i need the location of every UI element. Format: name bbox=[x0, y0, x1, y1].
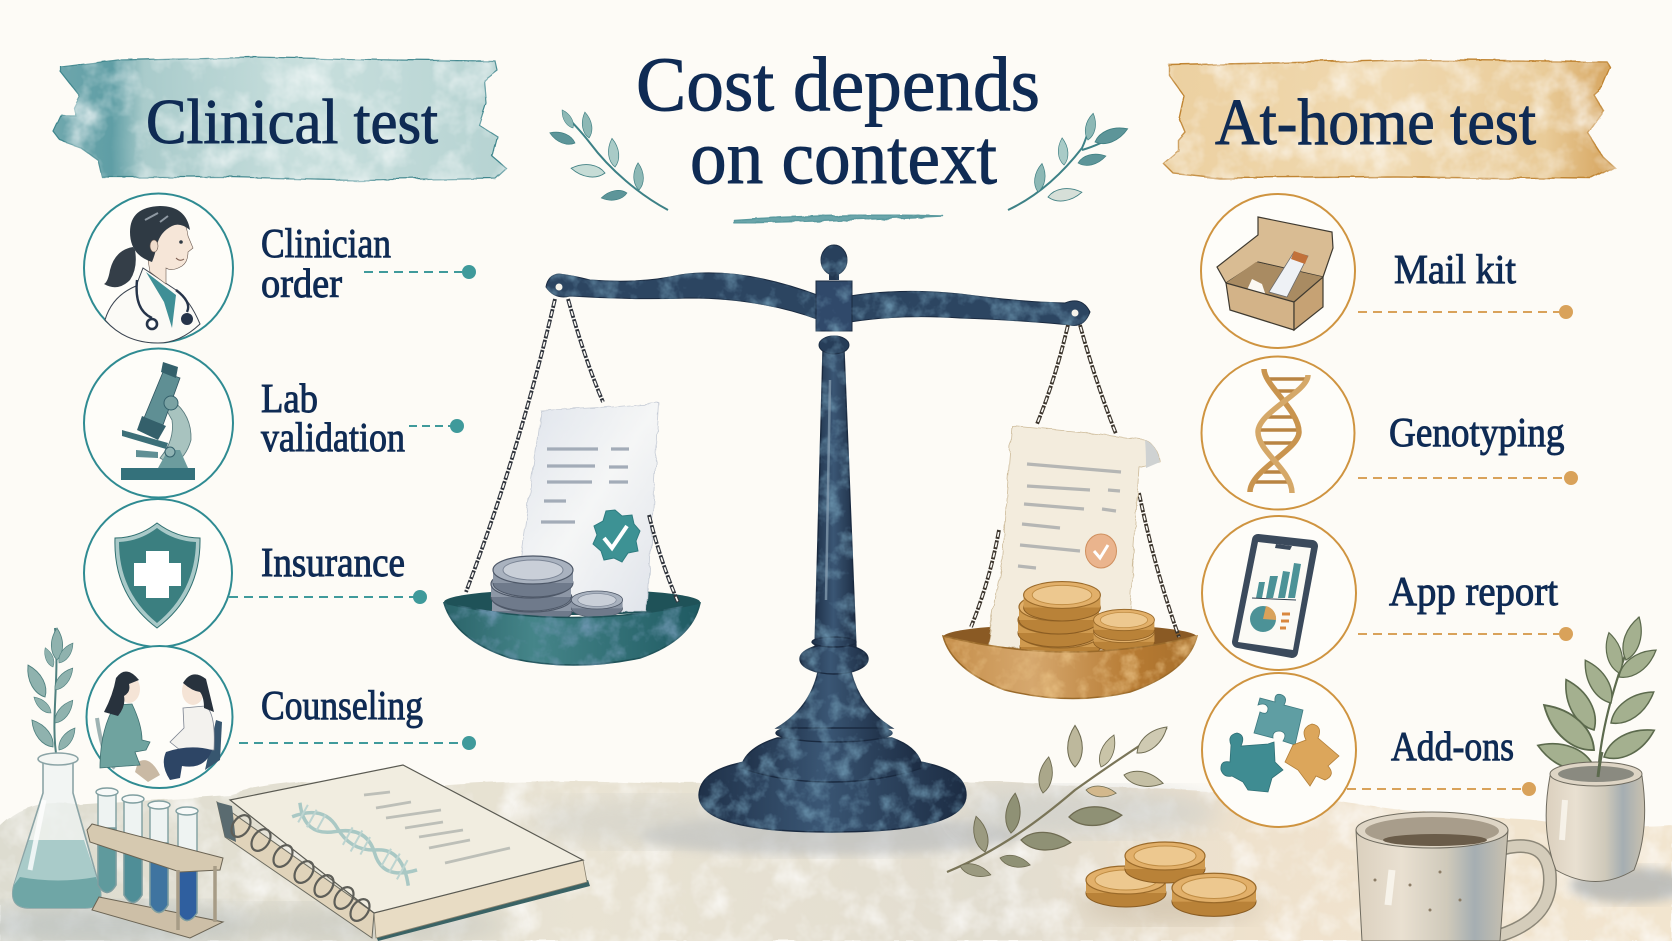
label: insurance: Insurance bbox=[261, 539, 405, 585]
title: on context bbox=[690, 114, 997, 200]
connector bbox=[1358, 627, 1573, 641]
icon: phone report bbox=[1202, 516, 1356, 670]
sprig: left of title bbox=[548, 108, 668, 210]
label: counseling: Counseling bbox=[261, 682, 423, 728]
left pan bbox=[444, 299, 700, 665]
label: add-ons: Add-ons bbox=[1391, 723, 1514, 769]
label: mail kit: Mail kit bbox=[1394, 246, 1517, 292]
test tube rack bbox=[87, 788, 223, 938]
label: clinician order: Clinician bbox=[261, 220, 391, 266]
icon: mail kit box bbox=[1201, 194, 1355, 348]
row: counseling bbox=[86, 646, 476, 788]
label: lab validation: validation bbox=[261, 414, 405, 460]
spiral rings bbox=[228, 812, 373, 924]
right receipt bbox=[987, 426, 1160, 648]
right pan bbox=[943, 325, 1197, 699]
right chains bbox=[971, 325, 1179, 637]
icon: dna helix bbox=[1202, 356, 1354, 510]
label: lab validation bbox=[261, 375, 405, 460]
row: mail kit bbox=[1201, 194, 1573, 348]
notebook with dna bbox=[217, 765, 590, 941]
row: genotyping bbox=[1202, 356, 1578, 510]
left receipt bbox=[520, 403, 659, 612]
banner: clinical test bbox=[54, 57, 506, 180]
cover dna bbox=[290, 798, 421, 886]
connector bbox=[364, 265, 476, 279]
left chains bbox=[466, 299, 603, 592]
balance scale bbox=[444, 245, 1197, 832]
row: app report bbox=[1202, 516, 1573, 670]
label: genotyping: Genotyping bbox=[1389, 409, 1564, 455]
heading: clinical test: Clinical test bbox=[146, 86, 438, 157]
icon: shield bbox=[84, 499, 232, 647]
title underline bbox=[734, 215, 943, 223]
table coins bbox=[1086, 842, 1256, 916]
plant in flask bbox=[22, 628, 79, 760]
label: clinician order bbox=[261, 220, 391, 306]
flask with plant bbox=[13, 628, 101, 908]
icon: two people talking bbox=[86, 646, 232, 788]
label: lab validation: Lab bbox=[261, 375, 318, 421]
tubes bbox=[96, 788, 198, 920]
left chain lower bbox=[649, 515, 678, 602]
scale stand bbox=[546, 245, 1090, 832]
connector bbox=[229, 590, 427, 604]
connector bbox=[1347, 782, 1536, 796]
row: insurance bbox=[84, 499, 427, 647]
flask glass bbox=[13, 762, 101, 908]
label: app report: App report bbox=[1389, 568, 1559, 614]
row: add-ons bbox=[1202, 673, 1536, 827]
title bbox=[636, 41, 1040, 200]
connector bbox=[409, 419, 464, 433]
potted plant bbox=[1534, 615, 1661, 882]
icon: puzzle pieces bbox=[1202, 673, 1356, 827]
connector bbox=[1358, 305, 1573, 319]
connector bbox=[1358, 471, 1578, 485]
icon: microscope bbox=[84, 348, 233, 498]
cover text lines bbox=[364, 792, 510, 863]
icon: clinician bbox=[84, 194, 233, 343]
heading: at-home test: At-home test bbox=[1215, 86, 1536, 159]
gold coins bbox=[1018, 582, 1154, 661]
banner: at-home test bbox=[1163, 60, 1614, 179]
branch on table bbox=[947, 722, 1172, 880]
silver coins bbox=[491, 556, 623, 625]
plant leaves bbox=[1534, 615, 1661, 777]
label: clinician order: order bbox=[261, 260, 342, 306]
row: lab validation bbox=[84, 348, 464, 498]
coffee mug bbox=[1356, 812, 1550, 941]
row: clinician order bbox=[84, 194, 476, 343]
table wash bbox=[0, 781, 1672, 941]
sprig: right of title bbox=[1008, 112, 1130, 210]
title: Cost depends bbox=[636, 41, 1040, 127]
connector bbox=[239, 736, 476, 750]
